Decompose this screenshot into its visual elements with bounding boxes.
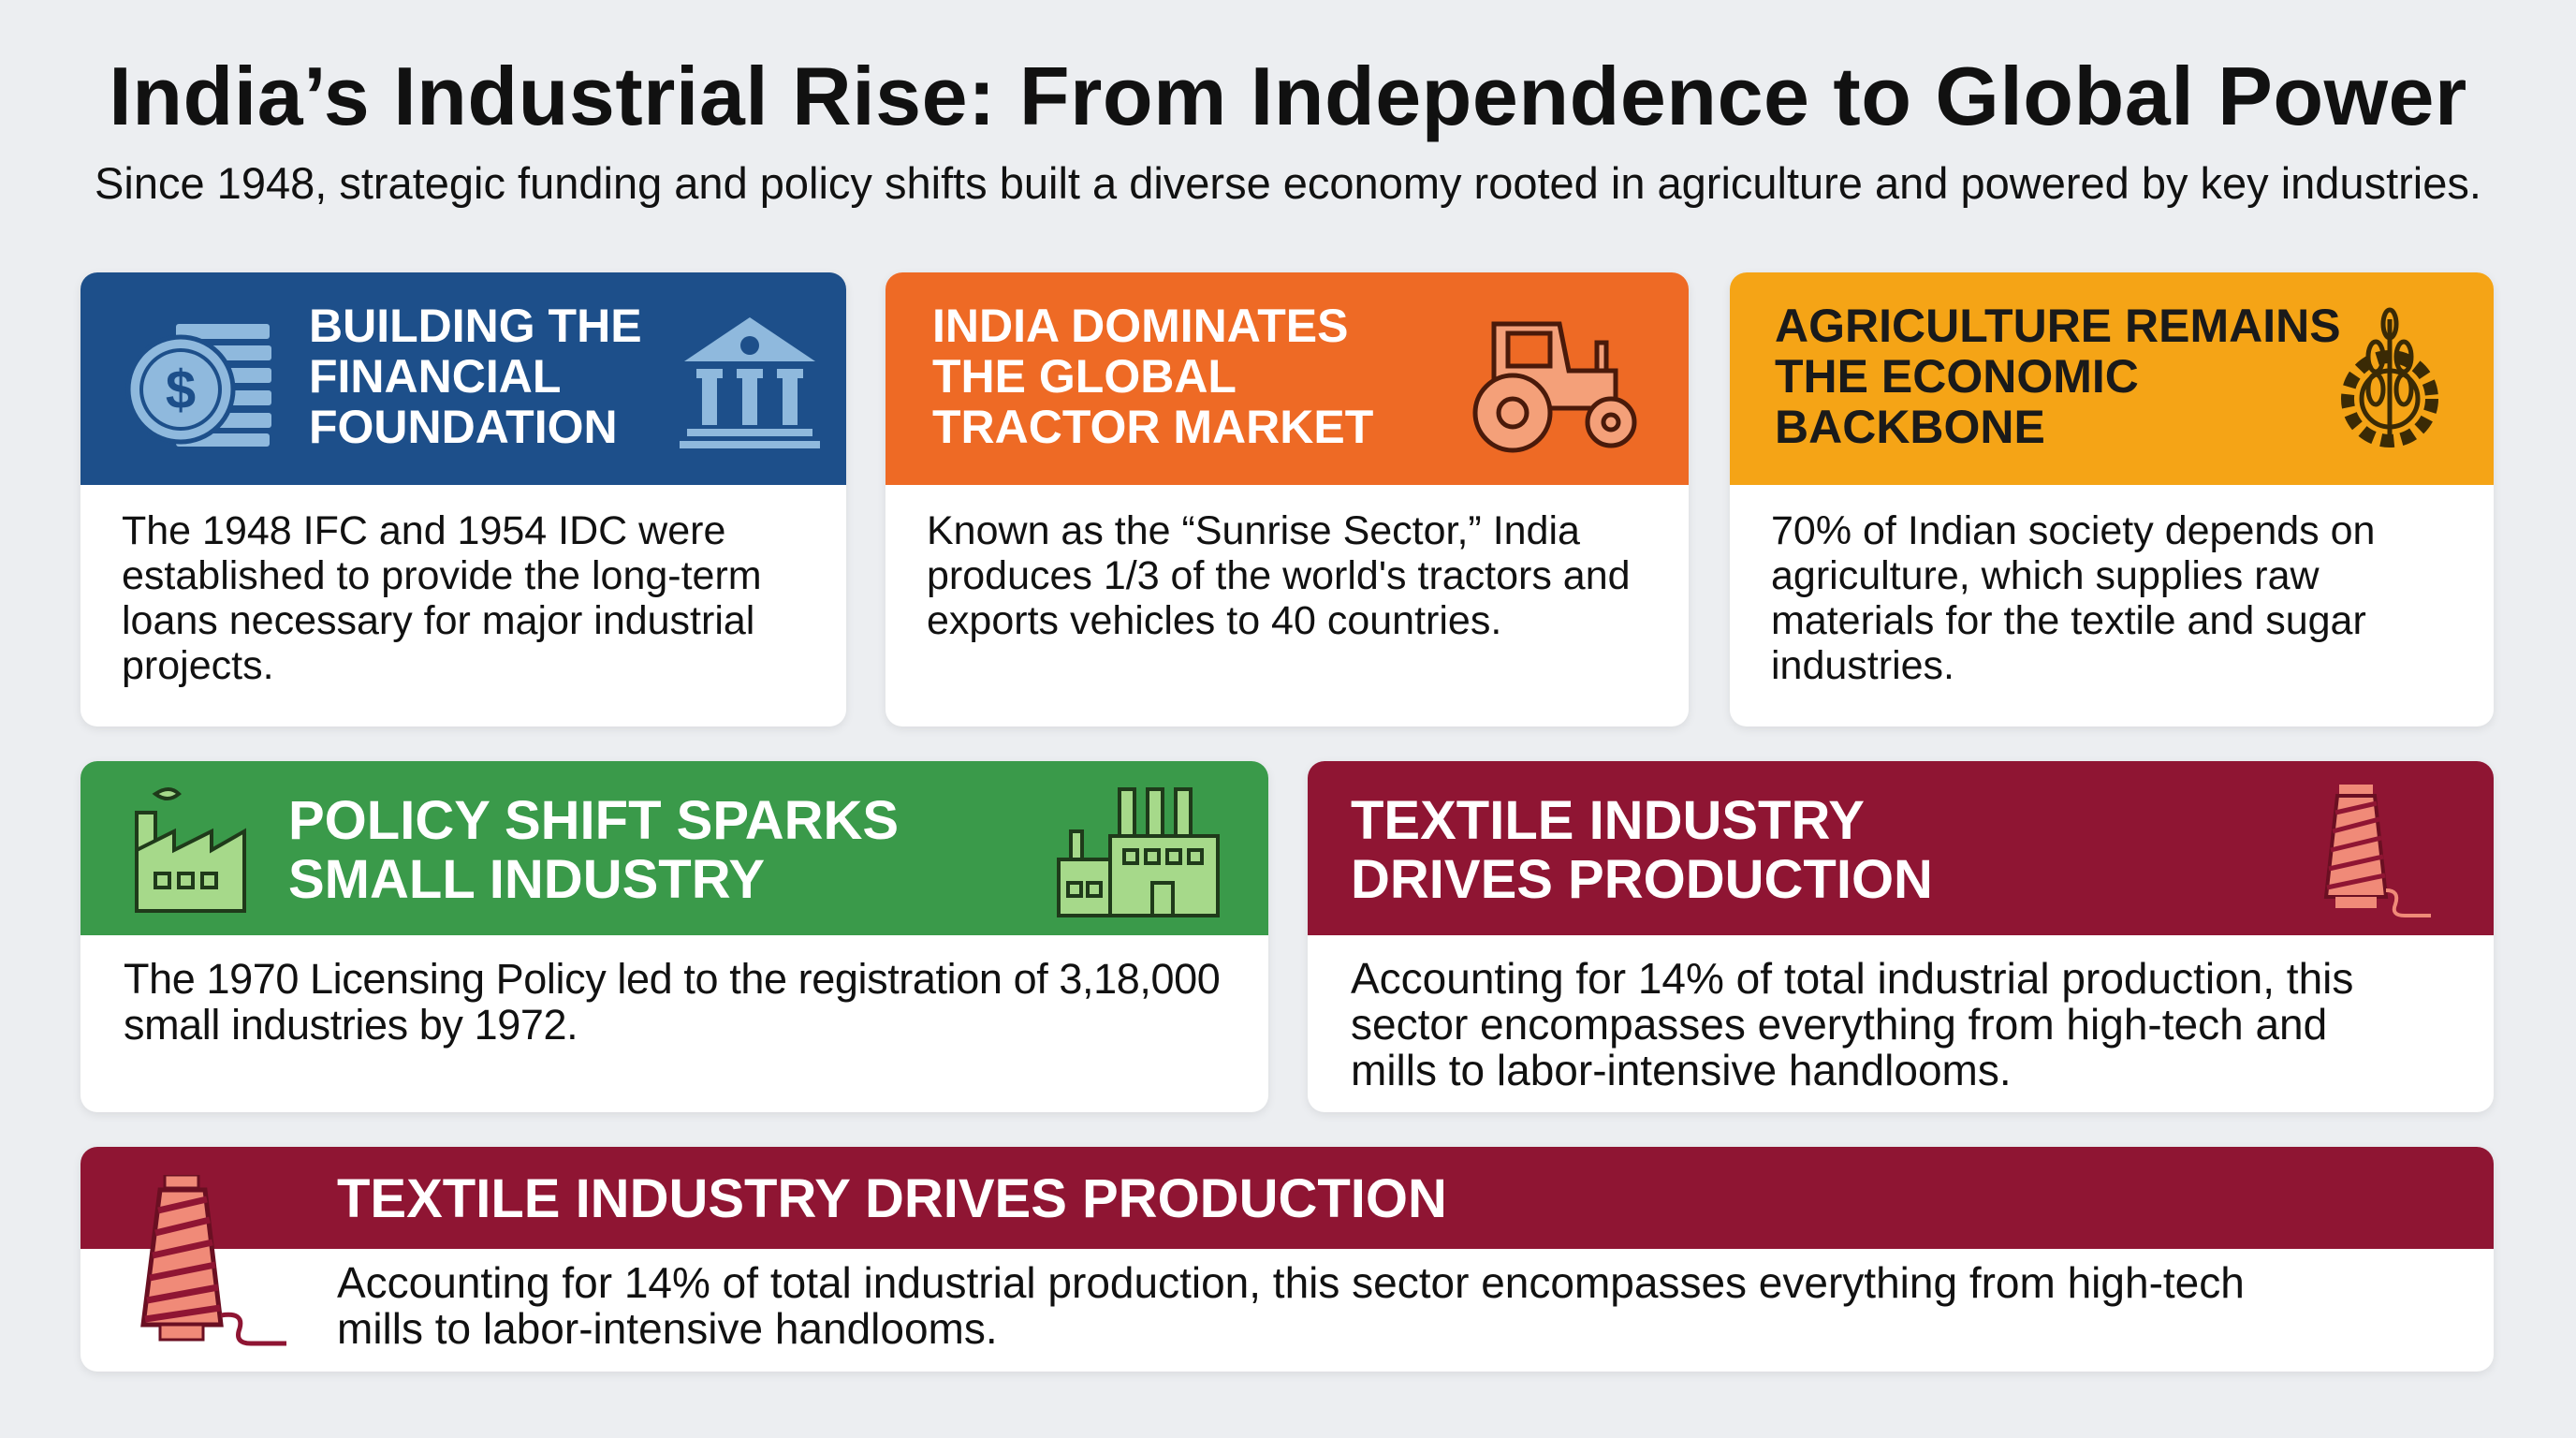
heading: DRIVES PRODUCTION [1351,849,1933,910]
heading: POLICY SHIFT SPARKS [288,790,899,851]
heading: FINANCIAL [309,350,561,403]
title: India’s Industrial Rise: From Independence to Global Power [109,50,2467,142]
body text: mills to labor-intensive handlooms. [1351,1046,2012,1094]
body text: exports vehicles to 40 countries. [927,598,1501,643]
body text: small industries by 1972. [124,1001,578,1049]
heading: AGRICULTURE REMAINS [1775,300,2341,352]
body text: agriculture, which supplies raw [1771,553,2320,598]
header [80,272,846,485]
body text: materials for the textile and sugar [1771,598,2366,643]
body text [927,508,1631,643]
body text: sector encompasses everything from high-tech and [1351,1000,2327,1049]
heading: TEXTILE INDUSTRY DRIVES PRODUCTION [337,1168,1447,1229]
icon: wheat gear [2341,307,2438,448]
body text [1771,508,2375,688]
icon: thread spool [140,1175,286,1346]
body text [122,508,762,688]
heading: TEXTILE INDUSTRY [1351,790,1865,851]
panel: tractor market [886,272,1689,726]
panel: textile industry (right) [1308,761,2494,1112]
heading: BACKBONE [1775,401,2045,453]
header [1308,761,2494,935]
heading: BUILDING THE [309,300,642,352]
body text: produces 1/3 of the world's tractors and [927,553,1631,598]
icon: thread spool [2323,785,2431,917]
panel: small industry [80,761,1268,1112]
header [80,1147,2494,1249]
icon: bank [680,317,820,448]
body text: Accounting for 14% of total industrial production, this [1351,954,2353,1003]
icon: factory right [1057,787,1220,917]
heading: THE GLOBAL [932,350,1237,403]
header [80,761,1268,935]
heading: TRACTOR MARKET [932,401,1373,453]
panel: textile industry (bottom) [80,1147,2494,1372]
body text [337,1258,2245,1353]
body text: The 1948 IFC and 1954 IDC were [122,508,725,553]
heading [1775,300,2341,453]
panel: agriculture [1730,272,2494,726]
body text: mills to labor-intensive handlooms. [337,1304,998,1353]
icon: coins [131,324,271,447]
body text [1351,954,2353,1094]
icon: coins: $ [166,360,196,420]
body text: Known as the “Sunrise Sector,” India [927,508,1580,553]
header [886,272,1689,485]
icon: factory left [135,787,246,913]
body text [124,955,1220,1049]
body text: established to provide the long-term [122,553,762,598]
heading: INDIA DOMINATES [932,300,1348,352]
heading [1351,790,1933,910]
heading: FOUNDATION [309,401,618,453]
header [1730,272,2494,485]
panel: financial foundation [80,272,846,726]
heading [288,790,899,910]
body text: Accounting for 14% of total industrial production, this sector encompasses everything from high-tech [337,1258,2245,1307]
icon: tractor [1473,322,1636,453]
subtitle: Since 1948, strategic funding and policy shifts built a diverse economy rooted in agriculture and powered by key industries. [95,158,2481,208]
heading [932,300,1373,453]
body text: loans necessary for major industrial [122,598,754,643]
body text: 70% of Indian society depends on [1771,508,2375,553]
heading: SMALL INDUSTRY [288,849,765,910]
heading: THE ECONOMIC [1775,350,2139,403]
body text: industries. [1771,643,1954,688]
body text: The 1970 Licensing Policy led to the registration of 3,18,000 [124,955,1220,1003]
body text: projects. [122,643,274,688]
heading [309,300,642,453]
